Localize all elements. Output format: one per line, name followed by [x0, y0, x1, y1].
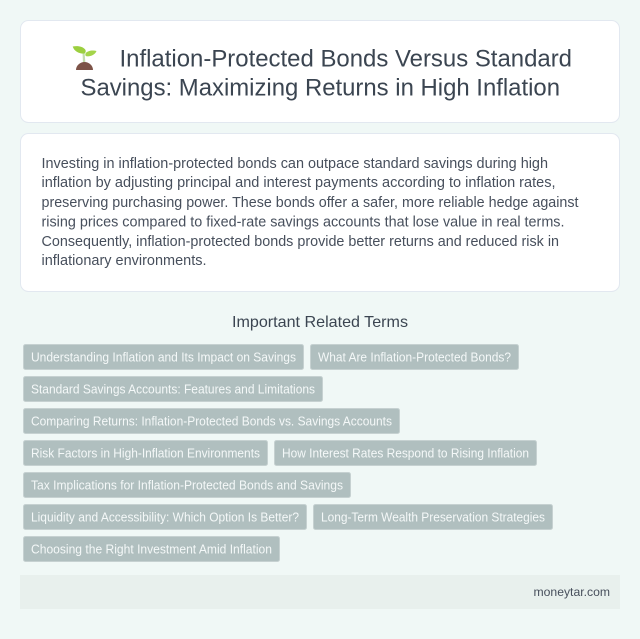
footer source text: moneytar.com: [534, 585, 610, 599]
icon: sprout: [73, 46, 96, 70]
chip: How Interest Rates Respond to Rising Inflation: [282, 446, 529, 460]
related terms chips: [24, 344, 552, 562]
summary text: preserving purchasing power. These bonds offer a safer, more reliable hedge against: [42, 195, 578, 211]
chip: [24, 536, 280, 562]
summary text: inflationary environments.: [42, 253, 206, 269]
title: Savings: Maximizing Returns in High Inflation: [80, 74, 560, 102]
chip: Standard Savings Accounts: Features and Limitations: [31, 382, 315, 396]
chip: [24, 472, 350, 498]
summary text: rising prices compared to fixed-rate savings accounts that lose value in real terms.: [42, 214, 564, 230]
chip: [274, 440, 536, 466]
chip: Long-Term Wealth Preservation Strategies: [321, 510, 545, 524]
chip: Choosing the Right Investment Amid Inflation: [31, 542, 272, 556]
heading: related terms: Important Related Terms: [232, 314, 408, 331]
summary text: inflation by adjusting principal and interest payments according to inflation rates,: [42, 175, 556, 191]
panel: title card: [20, 20, 620, 122]
chip: Tax Implications for Inflation-Protected Bonds and Savings: [31, 478, 343, 492]
summary text: Consequently, inflation-protected bonds provide better returns and reduced risk in: [42, 234, 559, 250]
chip: Risk Factors in High-Inflation Environments: [31, 446, 260, 460]
title: [80, 46, 572, 102]
title: Inflation-Protected Bonds Versus Standard: [120, 46, 572, 72]
summary text: [42, 156, 578, 269]
chip: Comparing Returns: Inflation-Protected Bonds vs. Savings Accounts: [31, 414, 392, 428]
panel: summary card: [20, 134, 620, 292]
chip: [24, 504, 306, 530]
chip: Liquidity and Accessibility: Which Option Is Better?: [31, 510, 299, 524]
chip: [314, 504, 552, 530]
chip: [24, 376, 322, 402]
chip: What Are Inflation-Protected Bonds?: [318, 350, 511, 364]
footer bar: [20, 575, 620, 609]
chip: [310, 344, 518, 370]
chip: [24, 344, 304, 370]
chip: [24, 440, 268, 466]
summary text: Investing in inflation-protected bonds can outpace standard savings during high: [42, 156, 548, 172]
chip: [24, 408, 400, 434]
chip: Understanding Inflation and Its Impact on Savings: [31, 350, 296, 364]
